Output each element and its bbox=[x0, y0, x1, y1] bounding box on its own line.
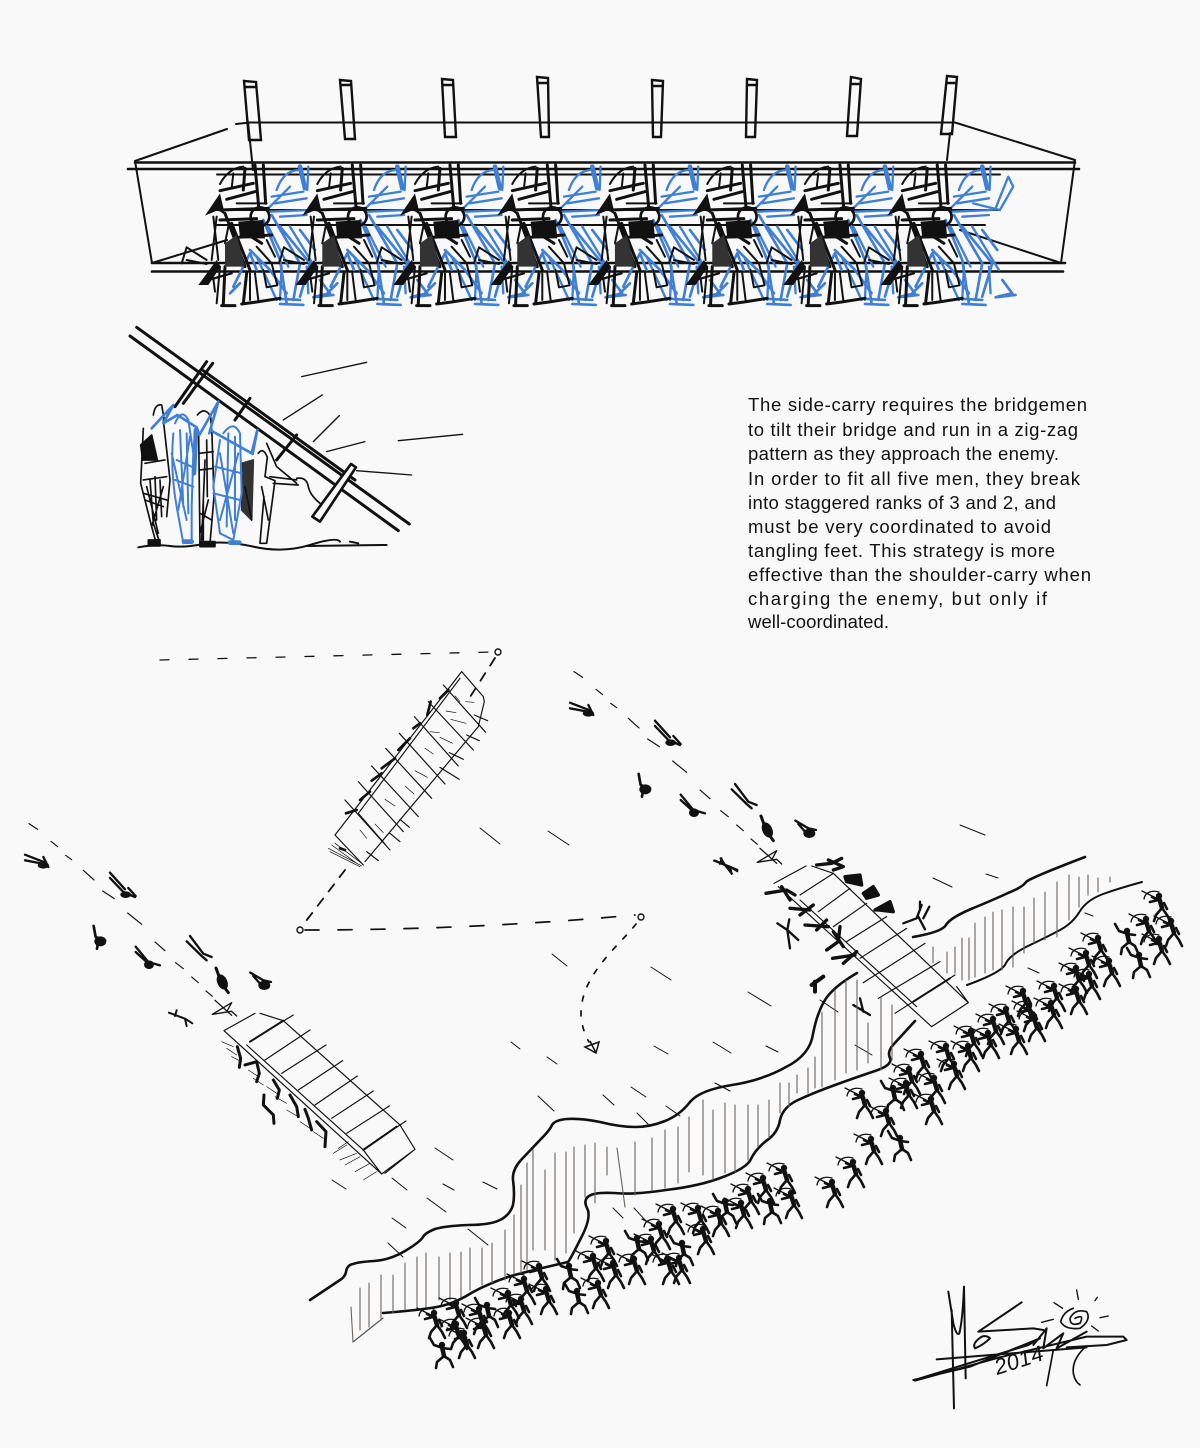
text block: side-carry description: to tilt their bridge and run in a zig-zag bbox=[748, 419, 1078, 440]
lower bank bbox=[383, 1021, 915, 1313]
dashed route of the zig-zag bbox=[160, 649, 644, 1053]
black bridgemen bbox=[141, 405, 320, 547]
arrowhead bbox=[585, 1041, 599, 1053]
bridge cross posts bbox=[244, 76, 957, 140]
blue bridgemen, second rank bbox=[230, 167, 1016, 305]
text block: side-carry description: pattern as they approach the enemy. bbox=[748, 443, 1059, 464]
bridge seen from above, being moved bbox=[328, 672, 488, 867]
text block: side-carry description: In order to fit all five men, they break bbox=[748, 468, 1081, 489]
right bridge laid across the river, under attack bbox=[715, 858, 968, 1027]
upper bank bbox=[310, 973, 857, 1300]
blue bridgemen bbox=[152, 402, 257, 543]
text block: side-carry description: The side-carry requires the bridgemen bbox=[748, 394, 1087, 415]
ground line bbox=[138, 540, 387, 550]
diagram: tilted bridge carried at the side, front view bbox=[130, 327, 463, 550]
text block: side-carry description: into staggered ranks of 3 and 2, and bbox=[748, 492, 1056, 513]
river banks bbox=[310, 857, 1142, 1342]
left bridge, set down bbox=[222, 1013, 415, 1180]
enemy archers along the river bbox=[417, 891, 1182, 1368]
text block: side-carry description: tangling feet. This strategy is more bbox=[748, 540, 1055, 561]
text block: side-carry description: effective than the shoulder-carry when bbox=[748, 564, 1091, 585]
bridge frame lines bbox=[128, 122, 1079, 272]
text block: side-carry description: must be very coordinated to avoid bbox=[748, 516, 1051, 537]
diagram: bridge carried by men, seen from the side bbox=[128, 76, 1079, 306]
signature year: 2014 bbox=[990, 1341, 1046, 1380]
scattered ground marks bbox=[332, 825, 1093, 1257]
motion lines bbox=[283, 362, 463, 475]
figures on the bridge bbox=[715, 858, 929, 1015]
artist signature with sun and year bbox=[913, 1287, 1127, 1408]
black bridgemen, first rank bbox=[182, 165, 962, 306]
text block: side-carry description: charging the enemy, but only if bbox=[748, 588, 1048, 609]
text block: side-carry description: well-coordinated. bbox=[747, 611, 889, 632]
river bed hatching bbox=[351, 875, 1110, 1342]
tilted bridge beams bbox=[130, 327, 409, 531]
runners approaching the left bridge bbox=[25, 824, 271, 1026]
runners approaching the right bridge bbox=[570, 672, 816, 874]
